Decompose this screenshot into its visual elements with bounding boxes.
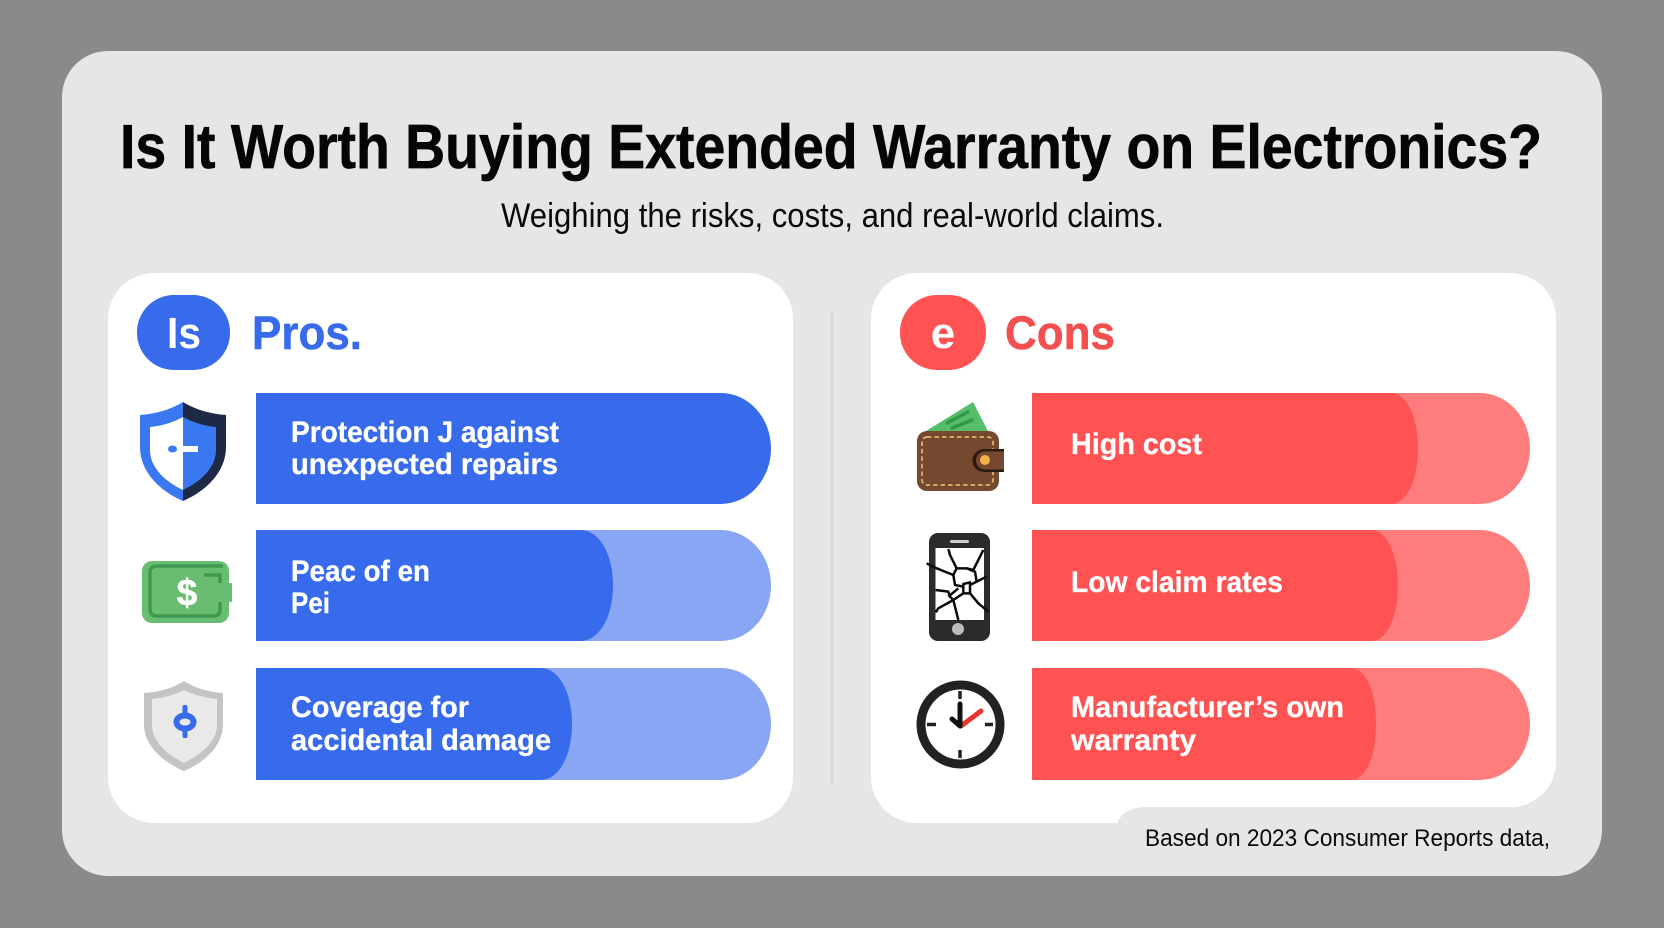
icon: cracked phone [927,533,990,641]
pros badge: Is [167,309,201,358]
icon: green cash [142,561,232,623]
bar: protection: unexpected repairs [291,448,558,481]
cons heading: Cons [1005,306,1115,359]
bar: manufacturer warranty: Manufacturer’s own [1071,691,1344,724]
pros heading: Pros. [252,306,362,359]
panel: pros [108,273,793,823]
bar: coverage: accidental damage [291,724,551,757]
icon: clock [921,685,1000,764]
panel: cons [871,273,1556,823]
bar: peace of mind: Pei [291,587,330,620]
bar: manufacturer warranty: warranty [1070,724,1196,757]
cons badge: e [931,309,955,358]
bar: coverage [256,668,771,780]
footnote: Based on 2023 Consumer Reports data, [1145,825,1550,852]
bar: protection: Protection J against [291,416,559,449]
bar: peace of mind [256,530,771,641]
bar: high cost [1032,393,1530,504]
bar: coverage: Coverage for [291,691,469,724]
bar: high cost: High cost [1071,428,1202,461]
icon: wallet [917,402,1004,491]
bar: peace of mind: Peac of en [291,555,430,588]
bar: low claim rates [1032,530,1530,641]
title: Is It Worth Buying Extended Warranty on Electronics? [120,113,1542,182]
pros badge [137,295,230,370]
cons badge [900,295,986,370]
icon: green cash: $ [177,572,198,613]
subtitle: Weighing the risks, costs, and real-world claims. [501,197,1164,235]
icon: blue shield [140,402,226,501]
bar: protection [256,393,771,504]
bar: manufacturer warranty [1032,668,1530,780]
bar: low claim rates: Low claim rates [1071,566,1283,599]
icon: grey shield [144,681,223,771]
